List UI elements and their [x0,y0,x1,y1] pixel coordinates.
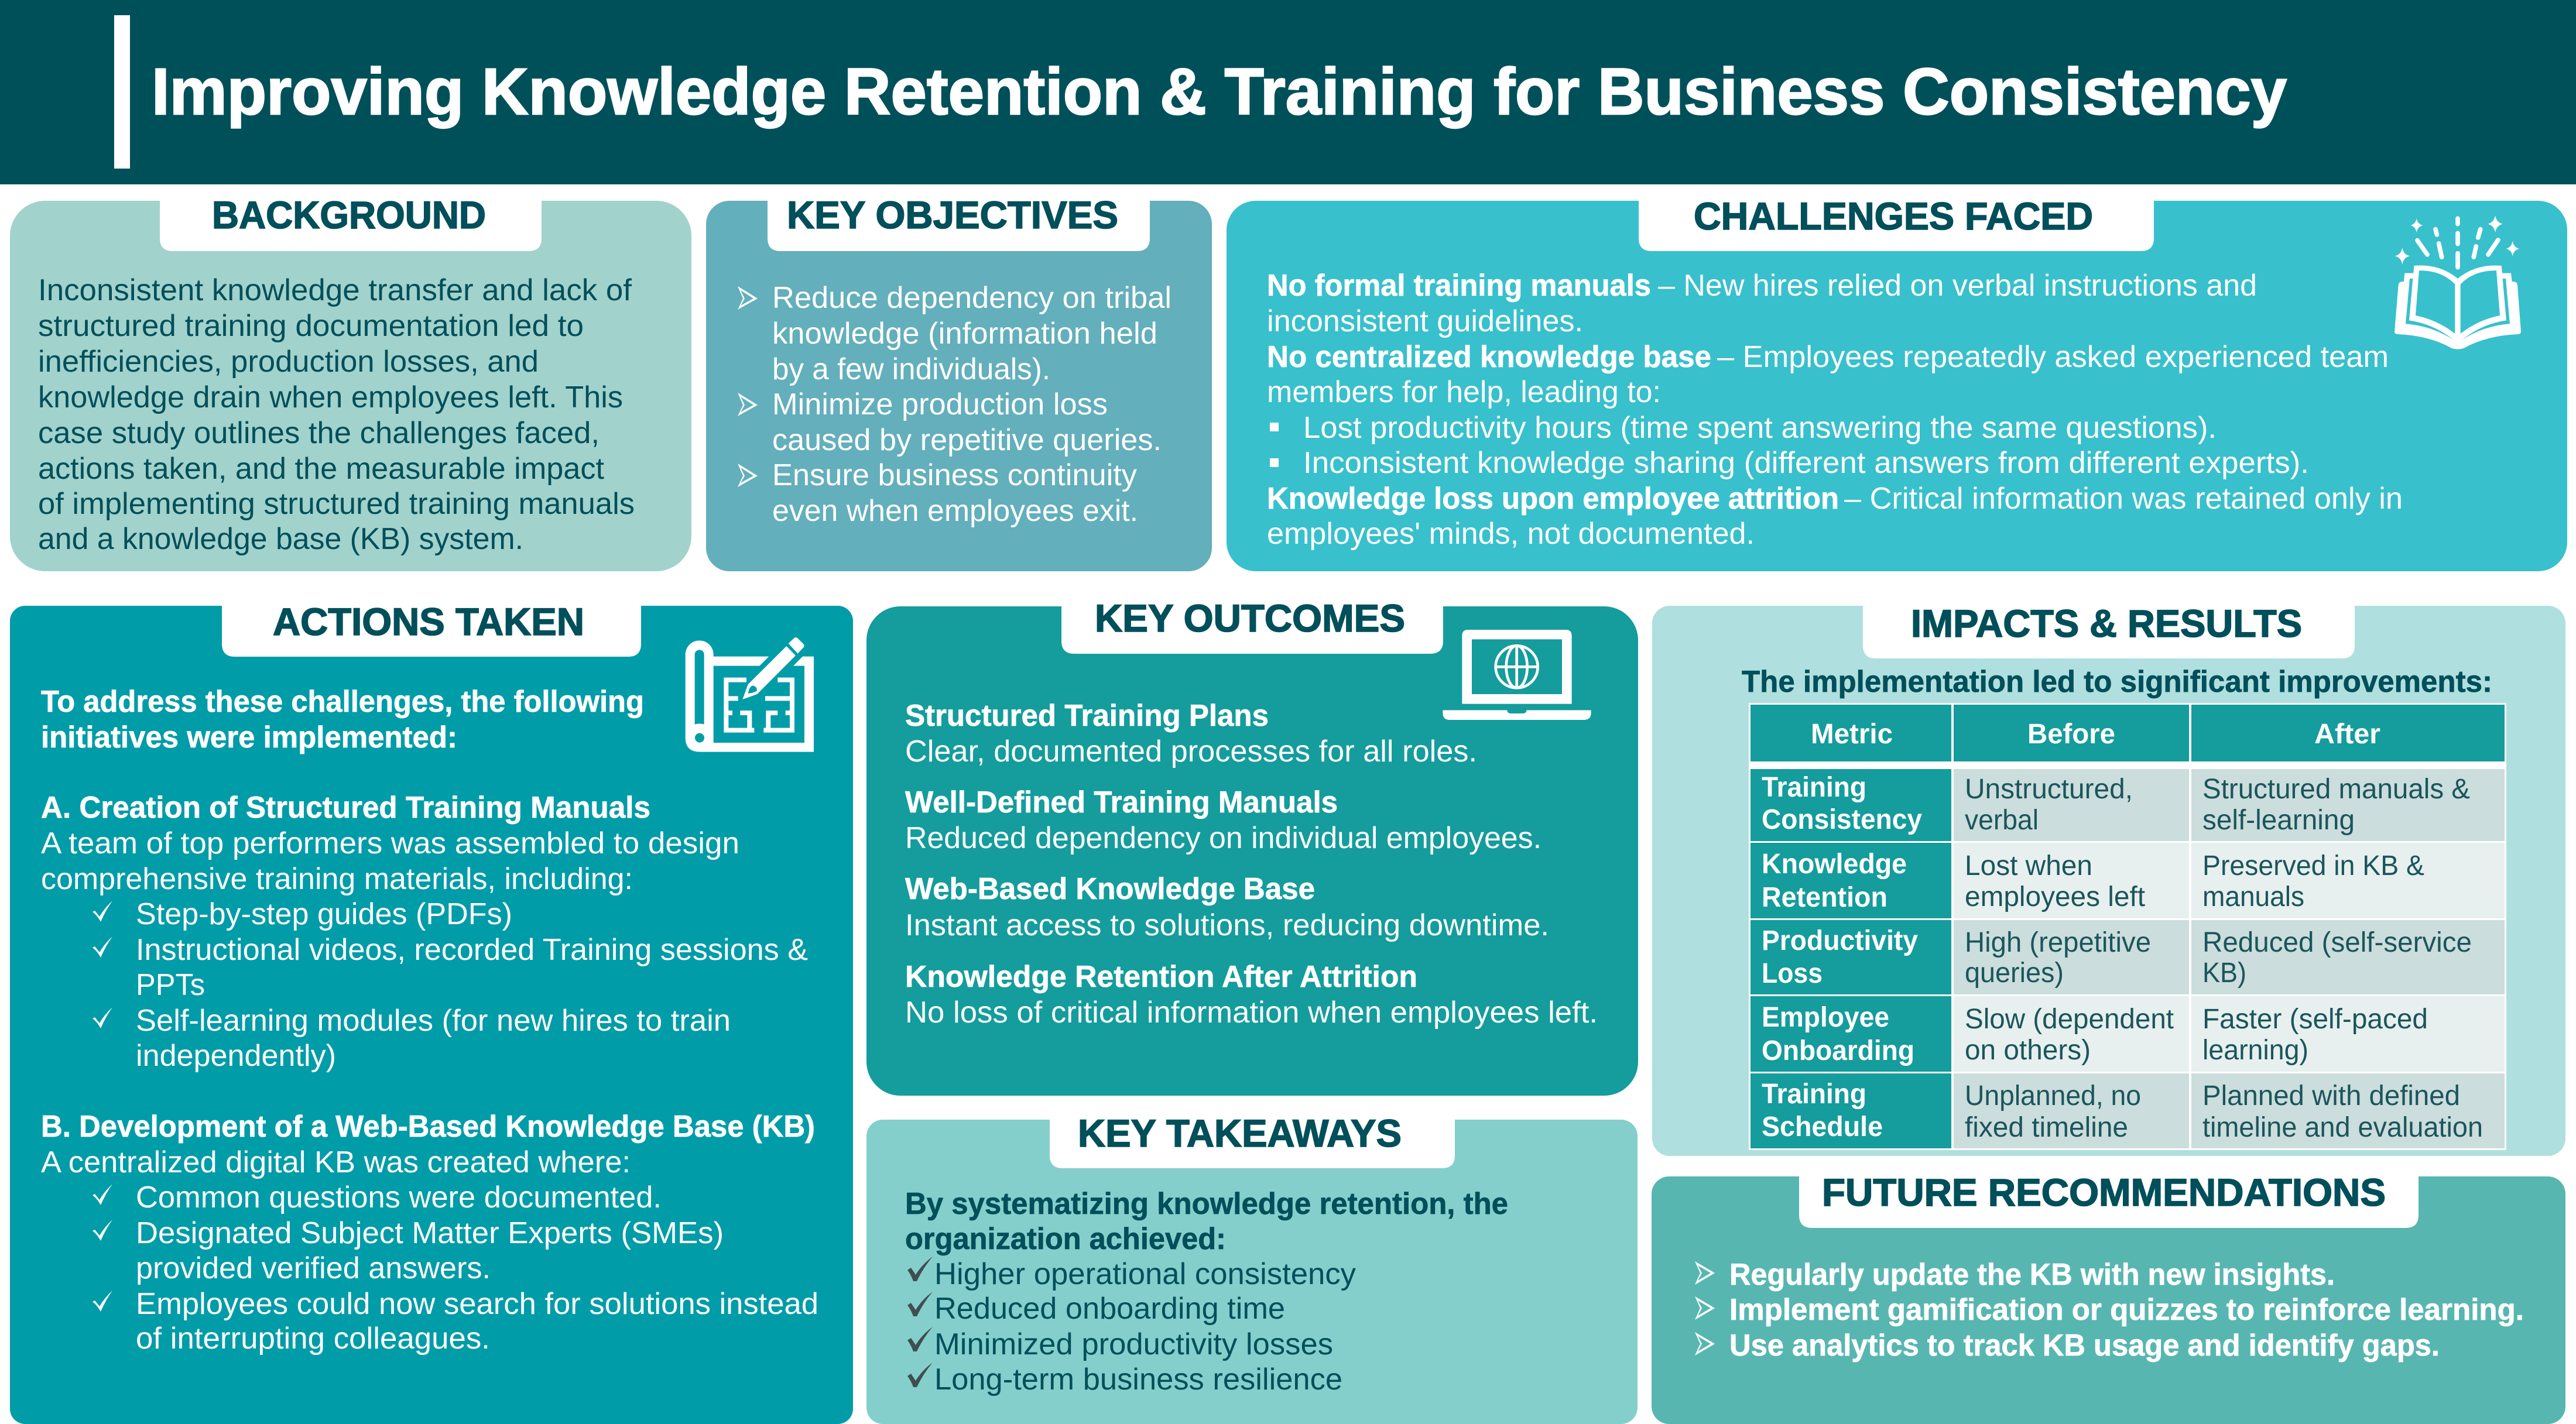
panel: actions taken [10,600,853,1424]
objectives list: even when employees exit. [772,494,1138,528]
table row: training schedule: Training [1762,1079,1866,1110]
table row: training consistency: Consistency [1762,804,1922,835]
challenges text [1267,269,2403,551]
table row: training schedule: Schedule [1762,1111,1883,1142]
challenges text: Lost productivity hours (time spent answering the same questions). [1303,411,2217,445]
table row: employee onboarding [1762,1002,2428,1066]
background text: knowledge drain when employees left. This [38,380,623,414]
heading tab: challenges faced [1639,194,2154,251]
panel: impacts and results [1652,602,2565,1156]
outcomes text: Well-Defined Training Manuals [905,785,1338,819]
challenges text: Inconsistent knowledge sharing (different answers from different experts). [1303,446,2309,480]
icon: open book with sparkles [2395,215,2521,349]
heading tab: background: BACKGROUND [212,193,486,236]
outcomes text: Reduced dependency on individual employees. [905,821,1542,855]
table row: productivity loss: Reduced (self-service [2202,927,2472,958]
heading tab: key objectives: KEY OBJECTIVES [787,193,1118,236]
table row: productivity loss: queries) [1965,958,2064,989]
panel: key takeaways [866,1111,1638,1424]
background text: actions taken, and the measurable impact [38,452,605,486]
table row: knowledge retention [1762,849,2424,913]
table row: employee onboarding: Slow (dependent [1965,1004,2174,1035]
actions text: Employees could now search for solutions instead [136,1287,818,1321]
takeaways text: organization achieved: [905,1222,1226,1256]
objectives list: knowledge (information held [772,317,1157,351]
takeaways text: Long-term business resilience [934,1363,1342,1396]
challenges text: employees' minds, not documented. [1267,517,1755,551]
objectives list: by a few individuals). [772,352,1050,386]
actions text: initiatives were implemented: [41,720,457,754]
heading tab: challenges faced: CHALLENGES FACED [1694,194,2093,238]
table header row: After [2314,719,2380,750]
table row: productivity loss [1762,925,2472,989]
actions text [41,685,818,1356]
background text [38,273,635,556]
heading tab: key objectives [768,193,1150,251]
heading tab: key outcomes [1061,596,1443,654]
table row: training schedule [1762,1079,2483,1143]
table row: knowledge retention: Retention [1762,882,1888,913]
background text: case study outlines the challenges faced, [38,416,600,450]
heading tab: key takeaways: KEY TAKEAWAYS [1078,1111,1402,1155]
actions text: A. Creation of Structured Training Manuals [41,791,650,825]
actions text: PPTs [136,968,205,1002]
outcomes text: Instant access to solutions, reducing downtime. [905,908,1549,942]
takeaways text: Reduced onboarding time [934,1292,1285,1326]
results table [1749,703,2506,1150]
icon: blueprint and pencil [686,637,814,752]
table row: employee onboarding: learning) [2202,1035,2308,1066]
table row: training consistency [1762,772,2470,836]
table row: productivity loss: High (repetitive [1965,927,2151,958]
table row: training consistency: Unstructured, [1965,774,2133,805]
actions text: A team of top performers was assembled to design [41,826,739,860]
challenges text: – New hires relied on verbal instructions and [1658,269,2257,303]
takeaways text: Minimized productivity losses [934,1327,1333,1361]
table row: training consistency: Structured manuals & [2202,774,2470,805]
heading tab: background [160,193,542,251]
objectives list: Minimize production loss [772,387,1108,421]
panel: background [10,193,691,571]
recommendations list: Implement gamification or quizzes to reinforce learning. [1729,1293,2524,1327]
challenges text: – Critical information was retained only in [1844,482,2403,516]
takeaways text: By systematizing knowledge retention, the [905,1187,1508,1221]
outcomes text: No loss of critical information when employees left. [905,996,1598,1030]
table row: training schedule: Unplanned, no [1965,1080,2141,1111]
table row: employee onboarding: Onboarding [1762,1035,1914,1066]
objectives list: caused by repetitive queries. [772,423,1162,457]
actions text: comprehensive training materials, including: [41,862,633,896]
title: Improving Knowledge Retention & Training for Business Consistency [152,55,2287,128]
recommendations list: Use analytics to track KB usage and identify gaps. [1729,1329,2440,1363]
objectives list: Ensure business continuity [772,458,1137,492]
background text: of implementing structured training manuals [38,487,635,521]
outcomes text: Clear, documented processes for all roles. [905,735,1477,768]
challenges text: members for help, leading to: [1267,375,1661,409]
table row: training schedule: fixed timeline [1965,1112,2128,1143]
heading tab: actions taken [222,600,641,657]
table row: knowledge retention: Preserved in KB & [2202,850,2424,881]
table row: training consistency: Training [1762,772,1866,803]
outcomes text: Web-Based Knowledge Base [905,872,1315,906]
outcomes text: Knowledge Retention After Attrition [905,960,1417,994]
panel: key objectives [706,193,1212,571]
objectives list [738,281,1171,528]
heading tab: impacts and results [1863,602,2355,658]
table row: training consistency: self-learning [2202,805,2355,836]
actions text: provided verified answers. [136,1251,491,1285]
background text: Inconsistent knowledge transfer and lack of [38,273,632,307]
table row: productivity loss: Loss [1762,958,1823,989]
heading tab: future recommendations: FUTURE RECOMMENDATIONS [1822,1171,2386,1214]
table row: training schedule: timeline and evaluation [2202,1112,2483,1143]
table row: productivity loss: Productivity [1762,925,1918,956]
panel: challenges faced [1227,194,2567,571]
outcomes text: Structured Training Plans [905,699,1269,733]
heading tab: key takeaways [1050,1111,1455,1168]
objectives list: Reduce dependency on tribal [772,281,1171,315]
table row: knowledge retention: manuals [2202,881,2304,912]
heading tab: key outcomes: KEY OUTCOMES [1095,596,1405,640]
table header row [1811,719,2380,750]
actions text: of interrupting colleagues. [136,1322,490,1356]
panel: future recommendations [1652,1171,2565,1424]
title accent bar [114,15,130,169]
table row: productivity loss: KB) [2202,958,2246,989]
table row: employee onboarding: Employee [1762,1002,1889,1033]
table row: employee onboarding: on others) [1965,1035,2091,1066]
background text: structured training documentation led to [38,309,584,343]
table row: knowledge retention: Knowledge [1762,849,1907,880]
actions text: A centralized digital KB was created where: [41,1145,631,1179]
actions text: B. Development of a Web-Based Knowledge Base (KB) [41,1110,815,1144]
actions text: Instructional videos, recorded Training sessions & [136,933,808,967]
table row: knowledge retention: employees left [1965,881,2145,912]
recommendations list: Regularly update the KB with new insights. [1729,1258,2335,1292]
actions text: Designated Subject Matter Experts (SMEs) [136,1216,724,1250]
takeaways text: Higher operational consistency [934,1257,1356,1291]
table header row: Metric [1811,719,1893,750]
table row: knowledge retention: Lost when [1965,850,2092,881]
actions text: independently) [136,1039,336,1073]
icon: laptop with globe [1443,630,1591,720]
background text: inefficiencies, production losses, and [38,345,539,379]
heading tab: impacts and results: IMPACTS & RESULTS [1911,602,2302,645]
takeaways text [905,1187,1508,1396]
table row: training schedule: Planned with defined [2202,1080,2460,1111]
actions text: Self-learning modules (for new hires to train [136,1004,731,1038]
table intro: The implementation led to significant improvements: [1742,665,2492,699]
actions text: Step-by-step guides (PDFs) [136,897,512,931]
table header row: Before [2027,719,2115,750]
challenges text: Knowledge loss upon employee attrition [1267,482,1839,516]
actions text: Common questions were documented. [136,1181,662,1214]
recommendations list [1695,1258,2524,1363]
heading tab: future recommendations [1799,1171,2419,1228]
header banner [0,0,2576,184]
table row: employee onboarding: Faster (self-paced [2202,1004,2428,1035]
challenges text: No centralized knowledge base [1267,340,1711,374]
panel: key outcomes [866,596,1638,1096]
challenges text: No formal training manuals [1267,269,1651,303]
table row: training consistency: verbal [1965,805,2039,836]
actions text: To address these challenges, the following [41,685,644,719]
challenges text: – Employees repeatedly asked experienced team [1717,340,2389,374]
background text: and a knowledge base (KB) system. [38,522,523,556]
challenges text: inconsistent guidelines. [1267,304,1583,338]
outcomes text [905,699,1598,1030]
heading tab: actions taken: ACTIONS TAKEN [273,600,584,643]
